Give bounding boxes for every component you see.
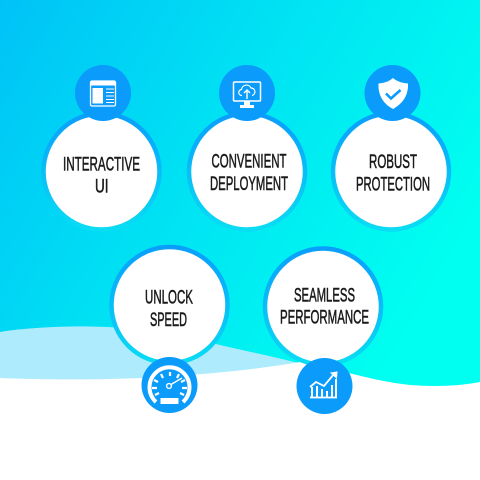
label: unlock speed: SPEED: [150, 309, 187, 331]
item: interactive UI: [44, 65, 160, 230]
circle: convenient deployment: [189, 114, 305, 230]
item: convenient deployment: [189, 65, 305, 230]
white wave: [0, 362, 480, 480]
icon: shield with check: [364, 65, 420, 121]
icon: growth chart: [296, 358, 352, 414]
item: unlock speed: [112, 247, 228, 413]
label: robust protection: [356, 151, 430, 196]
label: unlock speed: UNLOCK: [145, 286, 193, 308]
circle: seamless performance: [265, 248, 381, 364]
label: seamless performance: SEAMLESS: [294, 284, 355, 306]
item: robust protection: [333, 65, 449, 230]
label: robust protection: ROBUST: [369, 151, 417, 173]
item: seamless performance: [265, 248, 381, 414]
circle: interactive UI: [44, 114, 160, 230]
label: seamless performance: PERFORMANCE: [280, 306, 369, 328]
label: seamless performance: [280, 284, 369, 328]
circle: robust protection: [333, 114, 449, 230]
label: convenient deployment: CONVENIENT: [212, 150, 287, 172]
label: convenient deployment: DEPLOYMENT: [210, 173, 288, 195]
label: convenient deployment: [210, 150, 288, 195]
circle: unlock speed: [112, 247, 228, 363]
icon: speedometer: [142, 357, 198, 413]
icon: monitor with cloud upload: [219, 65, 275, 121]
light blue wave: [0, 326, 310, 400]
label: interactive UI: UI: [95, 176, 108, 198]
icon: browser window: [75, 65, 131, 121]
label: unlock speed: [145, 286, 193, 331]
label: interactive UI: [63, 154, 140, 198]
label: interactive UI: INTERACTIVE: [63, 154, 140, 176]
